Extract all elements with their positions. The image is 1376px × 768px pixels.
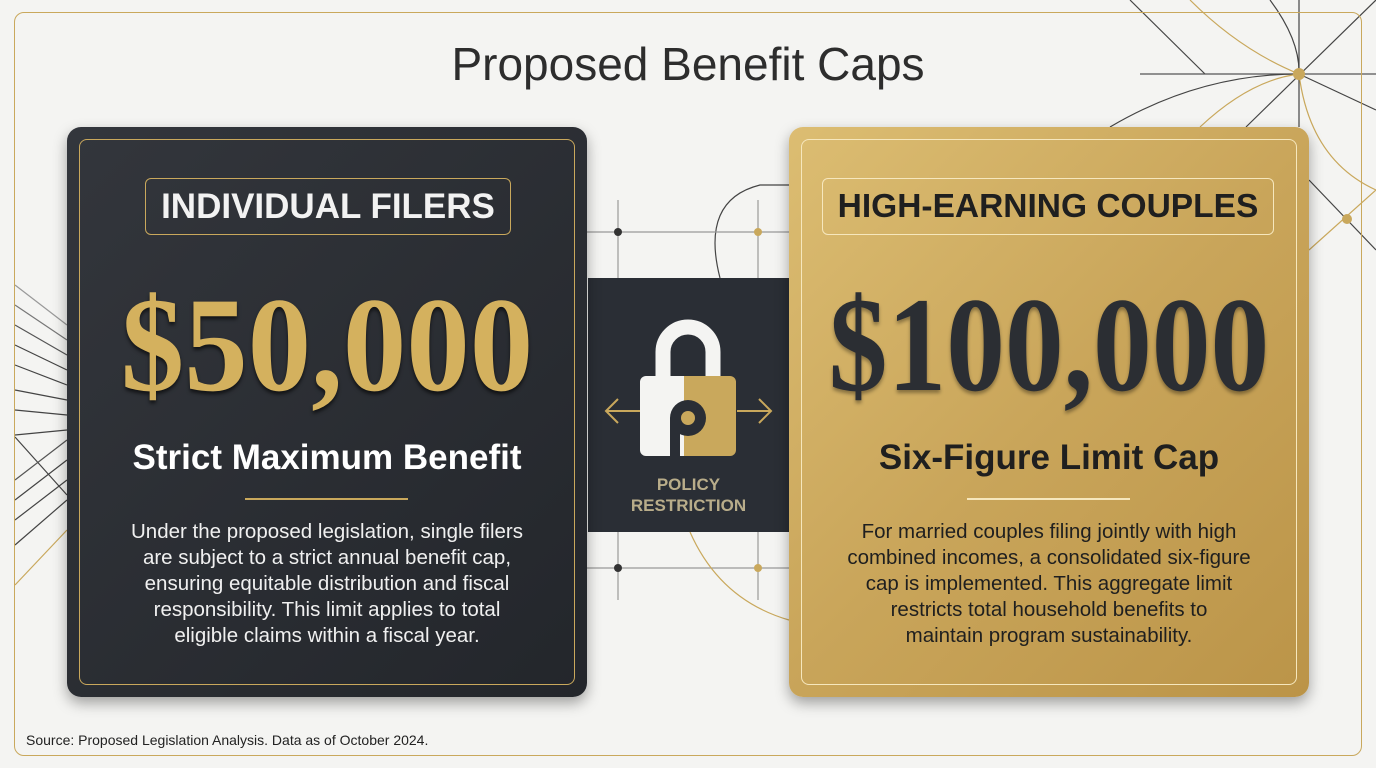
icon: padlock with arrows xyxy=(604,320,772,456)
body text: Under the proposed legislation, single filers xyxy=(131,520,523,543)
panel: individual filers xyxy=(67,127,587,697)
body text: combined incomes, a consolidated six-figure xyxy=(847,546,1251,569)
body text: ensuring equitable distribution and fiscal xyxy=(145,572,509,595)
label: policy restriction xyxy=(631,475,746,515)
heading: individual filers: INDIVIDUAL FILERS xyxy=(161,187,495,226)
body text: restricts total household benefits to xyxy=(891,598,1207,621)
title: Proposed Benefit Caps xyxy=(451,38,925,90)
panel: high-earning couples xyxy=(789,127,1309,697)
body text xyxy=(847,520,1251,647)
body text: eligible claims within a fiscal year. xyxy=(174,624,480,647)
body text xyxy=(131,520,523,647)
body text: responsibility. This limit applies to total xyxy=(154,598,500,621)
label: policy restriction: RESTRICTION xyxy=(631,496,746,515)
heading: high-earning couples: HIGH-EARNING COUPLES xyxy=(838,188,1258,225)
subtitle: Strict Maximum Benefit xyxy=(133,438,521,477)
body text: cap is implemented. This aggregate limit xyxy=(866,572,1232,595)
heading: individual filers xyxy=(145,178,511,235)
subtitle: Six-Figure Limit Cap xyxy=(879,438,1219,477)
body text: For married couples filing jointly with high xyxy=(862,520,1236,543)
source note: Source: Proposed Legislation Analysis. Data as of October 2024. xyxy=(26,732,428,748)
body text: are subject to a strict annual benefit cap, xyxy=(143,546,511,569)
number: $50,000: $50,000 xyxy=(121,271,533,420)
number: $100,000: $100,000 xyxy=(829,271,1269,420)
body text: maintain program sustainability. xyxy=(906,624,1192,647)
heading: high-earning couples xyxy=(822,178,1274,235)
middle panel: policy restriction xyxy=(588,278,789,532)
label: policy restriction: POLICY xyxy=(657,475,720,494)
